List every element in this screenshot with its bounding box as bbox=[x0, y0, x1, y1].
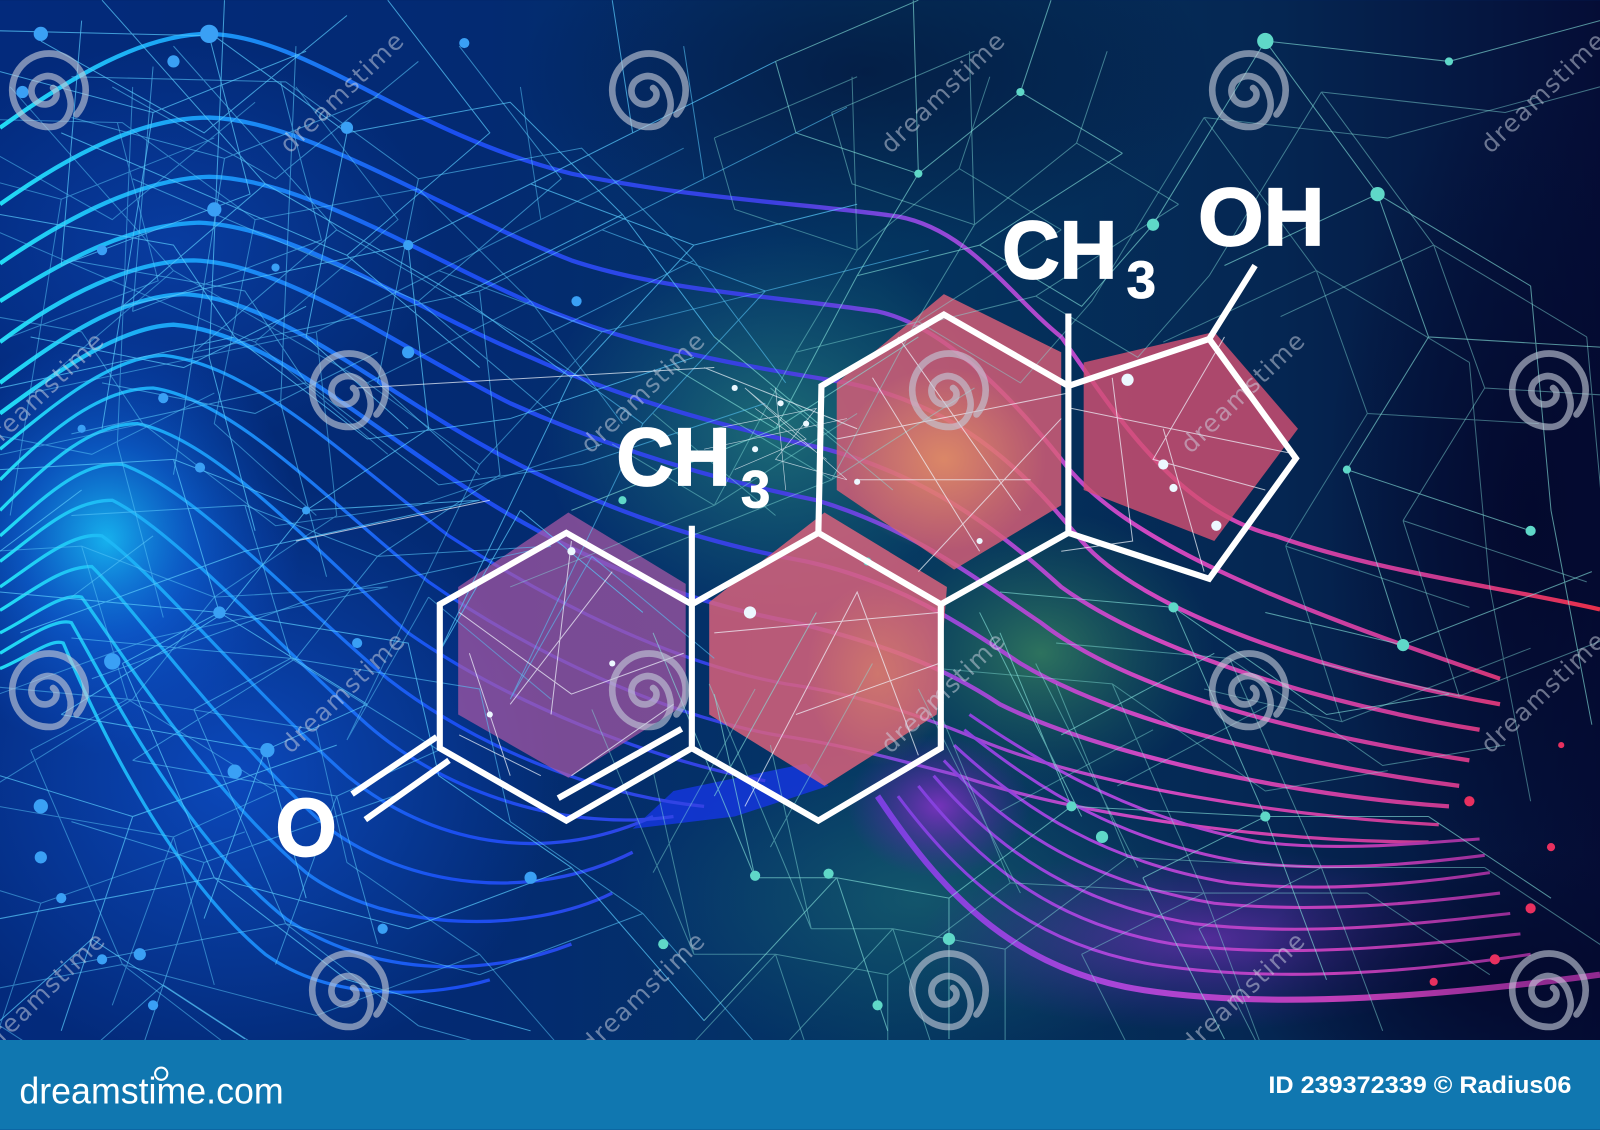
watermark text: dreamstime bbox=[1175, 925, 1312, 1059]
label: CH3 upper: CH bbox=[1002, 205, 1117, 296]
methyl bond lower bbox=[689, 526, 695, 604]
hexagon fill: ring D bbox=[1084, 332, 1298, 541]
watermark text: dreamstime bbox=[875, 25, 1012, 159]
watermark text: dreamstime bbox=[575, 925, 712, 1059]
ring A bonds bbox=[440, 533, 692, 821]
hexagon fill: ring A bbox=[458, 512, 686, 778]
molecule skeleton bonds bbox=[352, 266, 1296, 821]
hexagon fill: ring B bbox=[709, 512, 947, 786]
label: subscript 3 lower: 3 bbox=[741, 460, 770, 519]
hexagon fill: ring C bbox=[837, 294, 1061, 570]
molecule hexagon fills bbox=[458, 294, 1298, 786]
ketone double bond bbox=[352, 737, 449, 820]
label: OH: OH bbox=[1198, 172, 1324, 263]
label: subscript 3 upper: 3 bbox=[1127, 251, 1156, 310]
ring double bond bbox=[558, 729, 682, 798]
ring C bonds bbox=[818, 314, 1068, 604]
ring B bonds bbox=[692, 533, 941, 821]
label: CH3 lower: CH bbox=[616, 412, 731, 503]
watermark text: dreamstime bbox=[274, 25, 410, 159]
footer image id and credit: ID 239372339 © Radius06 bbox=[1268, 1072, 1571, 1099]
footer banner bbox=[0, 1040, 1600, 1130]
watermark text: dreamstime bbox=[875, 625, 1012, 759]
plexus network lines: bright highlights over rings bbox=[296, 337, 1296, 806]
ring D bonds bbox=[1068, 339, 1296, 579]
footer logo spiral bbox=[155, 1068, 167, 1080]
footer logo text: dreamstime.com bbox=[19, 1070, 284, 1111]
watermark text: dreamstime bbox=[1175, 325, 1312, 459]
label: O: O bbox=[276, 782, 337, 873]
watermark text: dreamstime bbox=[575, 325, 712, 459]
plexus network lines: teal and green bbox=[571, 0, 1600, 1039]
watermark text: dreamstime bbox=[275, 625, 412, 759]
hydroxyl bond bbox=[1209, 266, 1255, 339]
methyl bond upper bbox=[1065, 313, 1071, 386]
plexus network lines: blue bbox=[0, 0, 857, 1039]
